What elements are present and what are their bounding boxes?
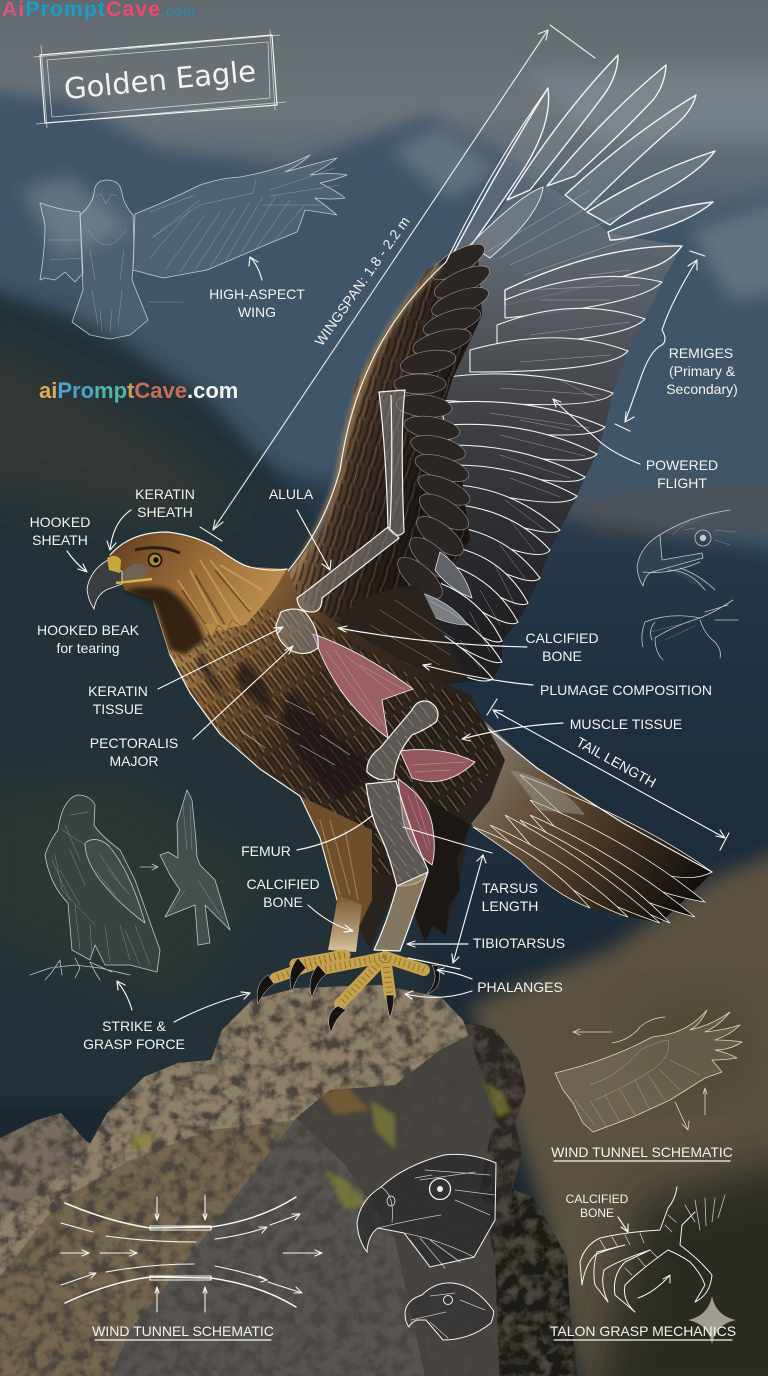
strike and grasp label <box>83 981 250 1052</box>
powered flight label: FLIGHT <box>657 475 707 491</box>
femur label <box>241 815 373 859</box>
title text: Golden Eagle <box>63 54 257 106</box>
calcified bone label left: CALCIFIED <box>246 876 320 892</box>
legs and feet <box>257 895 440 1033</box>
left top labels: for tearing <box>56 640 120 656</box>
pectoralis label <box>90 646 293 769</box>
keratin tissue label: TISSUE <box>93 701 143 717</box>
remiges label: (Primary & <box>669 363 736 379</box>
lower leg labels <box>403 827 565 999</box>
calcified bone label left: BONE <box>263 894 303 910</box>
remiges label <box>615 251 738 431</box>
dark leg fringe <box>415 800 470 942</box>
sketch: talon mechanics <box>566 1187 725 1312</box>
left top labels: HOOKED <box>30 514 90 530</box>
flight body <box>72 180 148 339</box>
body outline <box>153 600 337 900</box>
right callout labels: CALCIFIED <box>525 630 599 646</box>
skeleton bones <box>276 390 438 951</box>
rock perch <box>0 985 580 1376</box>
talons <box>257 958 440 1033</box>
yellow toes <box>275 955 424 1004</box>
sketch: talon mechanics: BONE <box>580 1206 614 1220</box>
pectoralis label: MAJOR <box>110 753 158 769</box>
watermark centre-left: aiPromptCave.com <box>39 378 238 403</box>
pectoral and leg muscles <box>313 634 475 865</box>
femur <box>367 701 438 780</box>
secondary flight feathers <box>400 276 662 681</box>
strike and grasp label: GRASP FORCE <box>83 1036 185 1052</box>
sketch: eagle diving <box>140 790 230 945</box>
calcified bone label left <box>246 876 353 932</box>
primary feather tips <box>447 55 715 305</box>
dark chest patches <box>198 650 380 800</box>
left tarsus <box>328 895 362 952</box>
tibia <box>366 781 428 886</box>
dark underwing coverts <box>340 585 470 682</box>
body plumage <box>110 532 505 951</box>
wind tunnel heading right: WIND TUNNEL SCHEMATIC <box>551 1144 733 1160</box>
sketch: beak head right <box>637 510 735 590</box>
remiges label: Secondary) <box>666 381 738 397</box>
right callout labels <box>338 626 712 741</box>
powered flight label: POWERED <box>646 457 718 473</box>
wing leading edge <box>285 265 440 582</box>
left top labels: ALULA <box>269 486 314 502</box>
wingspan measure: WINGSPAN: 1.8 - 2.2 m <box>311 213 413 349</box>
lower leg labels: TARSUS <box>482 880 538 896</box>
thigh plumage <box>300 796 372 925</box>
wing <box>280 55 715 695</box>
sketch: perched eagle <box>30 795 160 980</box>
sketch: small head on rock <box>405 1283 494 1340</box>
right callout labels: MUSCLE TISSUE <box>570 716 682 732</box>
wing label: WING <box>238 304 276 320</box>
flight left wing <box>40 203 83 282</box>
sketch: eagle in flight <box>40 155 347 339</box>
tail length measure: TAIL LENGTH <box>574 734 659 791</box>
powered flight label <box>553 399 718 491</box>
wing label: HIGH-ASPECT <box>209 286 305 302</box>
sketch: talon mechanics: CALCIFIED <box>566 1192 629 1206</box>
shoulder joint <box>276 609 318 654</box>
wing label <box>209 257 305 320</box>
left top labels: HOOKED BEAK <box>37 622 140 638</box>
right callout labels: BONE <box>542 648 582 664</box>
grey lower coverts <box>412 590 468 625</box>
feather barbs <box>460 270 640 668</box>
wing membrane base <box>395 185 682 685</box>
eye <box>148 554 162 566</box>
sketch: head on rock <box>357 1154 496 1268</box>
right callout labels: PLUMAGE COMPOSITION <box>540 682 712 698</box>
keratin tissue label <box>88 627 283 717</box>
left top labels: SHEATH <box>137 504 193 520</box>
covert feathers <box>280 245 482 695</box>
lower leg labels: TIBIOTARSUS <box>473 935 565 951</box>
beak <box>87 560 122 609</box>
pectoralis label: PECTORALIS <box>90 735 178 751</box>
sketch: talon right <box>642 600 738 660</box>
sparkle mark <box>688 1296 736 1344</box>
left top labels: KERATIN <box>135 486 195 502</box>
sketch: wing in tunnel <box>555 1010 742 1132</box>
toe scales <box>275 955 424 1004</box>
left top labels: SHEATH <box>32 532 88 548</box>
tarsus <box>374 872 428 951</box>
nape hackles <box>178 560 262 632</box>
humerus <box>297 527 399 612</box>
flight right wing <box>133 155 347 278</box>
remiges label: REMIGES <box>669 345 733 361</box>
keratin tissue label: KERATIN <box>88 683 148 699</box>
lower leg labels: PHALANGES <box>477 979 563 995</box>
title box <box>34 30 286 128</box>
tail feathers <box>440 690 712 923</box>
airfoil wind tunnel schematic <box>61 1195 322 1312</box>
left top labels <box>30 486 331 656</box>
head and beak <box>87 532 287 655</box>
lower leg labels: LENGTH <box>482 898 538 914</box>
wind tunnel heading left: WIND TUNNEL SCHEMATIC <box>92 1323 274 1339</box>
tail length measure <box>487 699 729 850</box>
femur label: FEMUR <box>241 843 291 859</box>
strike and grasp label: STRIKE & <box>102 1018 167 1034</box>
wingspan measure <box>200 25 595 541</box>
radius and ulna <box>379 390 405 535</box>
dark throat <box>125 587 205 655</box>
talon heading: TALON GRASP MECHANICS <box>550 1323 736 1339</box>
